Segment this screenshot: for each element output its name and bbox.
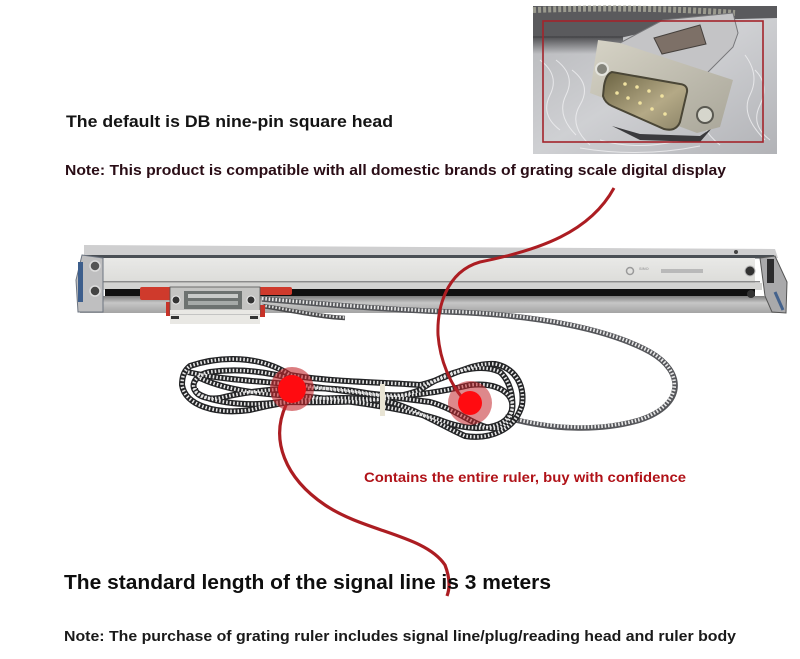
connector D shell — [603, 72, 687, 130]
marker: plug — [448, 381, 492, 425]
marker: signal line — [270, 367, 314, 411]
connector back shell — [620, 13, 738, 77]
red leader line to connector — [438, 188, 614, 402]
note: compatibility: Note: This product is compatible with all domestic brands of grating scale digital display — [65, 162, 727, 179]
ruler logo: SINO — [639, 266, 649, 271]
right end cap — [734, 250, 787, 313]
connector shadow — [612, 126, 712, 142]
left end cap — [76, 255, 103, 312]
red leader line to signal line — [280, 405, 449, 596]
connector front plate — [590, 40, 733, 133]
cable coil — [182, 359, 523, 437]
red highlight frame — [543, 21, 763, 142]
heading: signal line length: The standard length of the signal line is 3 meters — [64, 572, 551, 594]
grating ruler body — [76, 245, 787, 313]
ruler logo — [626, 266, 703, 274]
callout: entire ruler: Contains the entire ruler, buy with confidence — [364, 469, 686, 485]
note: purchase contents: Note: The purchase of grating ruler includes signal line/plug/reading head and ruler body — [64, 628, 737, 645]
heading: default connector: The default is DB nine-pin square head — [66, 112, 393, 131]
reading head — [140, 287, 292, 324]
signal cable — [262, 298, 675, 428]
photo: DB nine-pin connector inset — [533, 6, 777, 154]
